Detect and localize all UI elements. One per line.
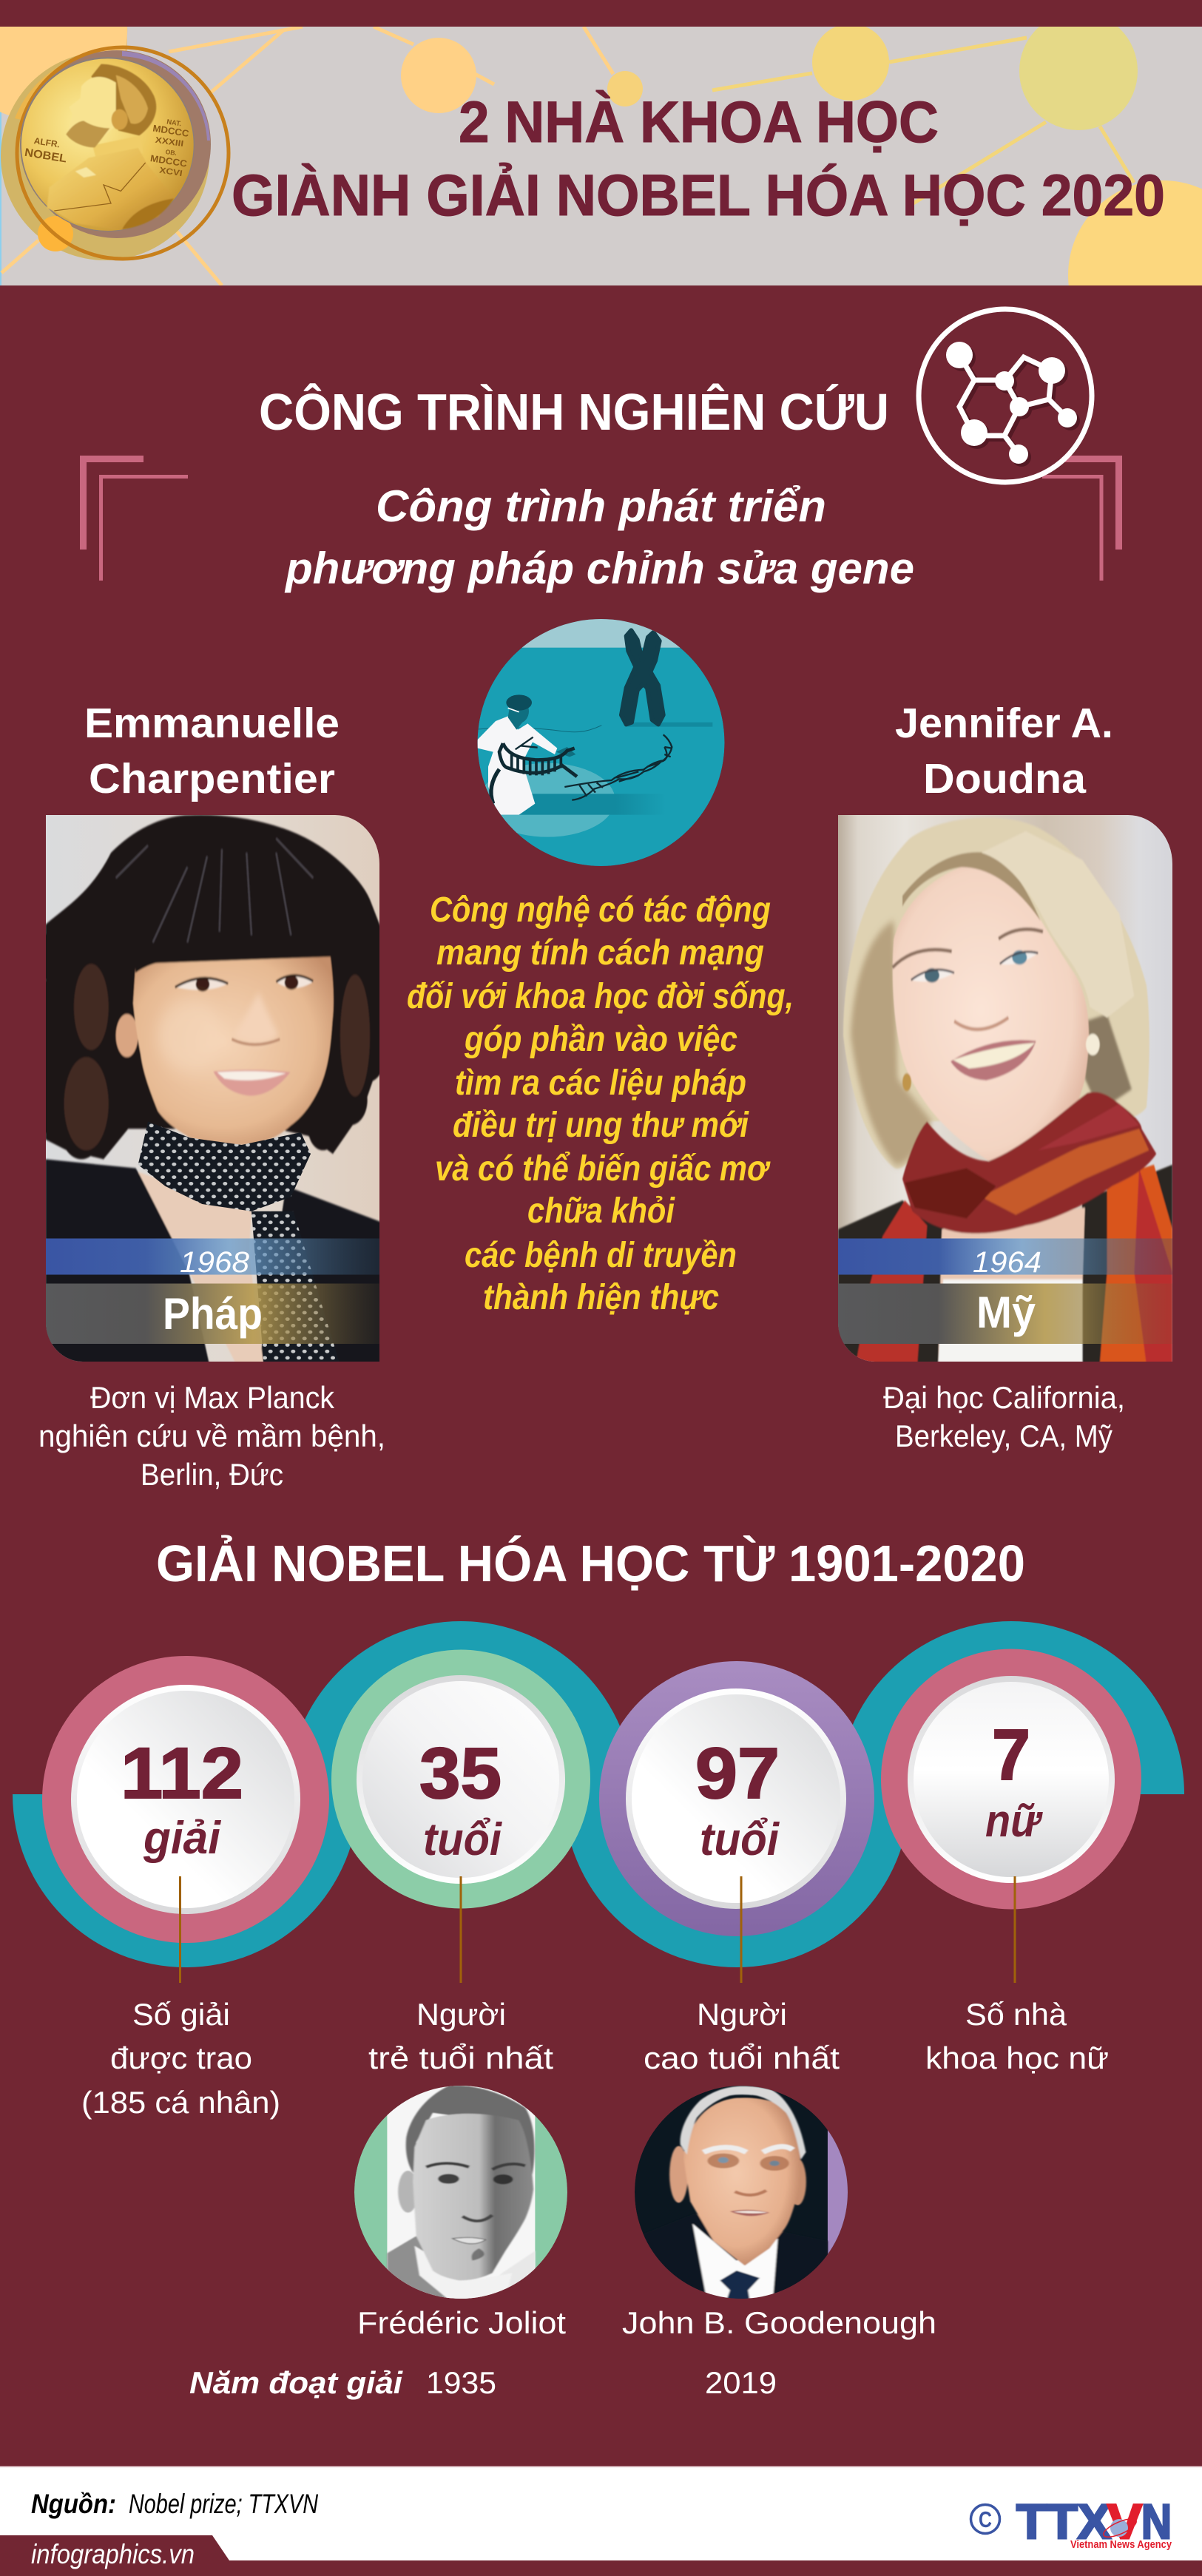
stat: 7 women xyxy=(881,1649,1141,1910)
subtitle: phương pháp chỉnh sửa gene xyxy=(284,544,914,593)
stat: 112 awards: giải xyxy=(143,1813,222,1864)
illustration: scientist editing DNA xyxy=(476,619,727,866)
Nobel portrait relief: OB. xyxy=(165,148,178,157)
caption: youngest xyxy=(368,1997,553,2075)
stat circles xyxy=(13,1621,1184,1983)
caption: youngest: Người xyxy=(416,1997,506,2032)
name: Emmanuelle xyxy=(84,700,340,747)
Nobel portrait relief: NOBEL xyxy=(24,146,67,166)
caption: women xyxy=(925,1997,1109,2075)
name: Doudna xyxy=(923,755,1087,802)
portrait: Frédéric Joliot xyxy=(354,2083,567,2302)
stat captions xyxy=(81,1997,1109,2120)
logo: TTXVN: N xyxy=(1141,2494,1172,2549)
caption: awards: (185 cá nhân) xyxy=(81,2085,280,2120)
red scarf xyxy=(856,1200,927,1365)
award years xyxy=(189,2365,777,2400)
yellow description text: chữa khỏi xyxy=(527,1191,675,1231)
yellow description text: đối với khoa học đời sống, xyxy=(407,977,794,1016)
yellow description text: tìm ra các liệu pháp xyxy=(455,1064,746,1103)
panel: Jennifer A. Doudna xyxy=(838,700,1172,1453)
Nobel portrait relief xyxy=(21,58,194,231)
country: Mỹ xyxy=(976,1288,1036,1337)
stat: 97 years old: 97 xyxy=(695,1733,780,1813)
birth year: 1964 xyxy=(973,1246,1041,1279)
award years: Năm đoạt giải xyxy=(189,2365,403,2400)
stat: 35 years old: 35 xyxy=(419,1733,502,1813)
connector lines xyxy=(180,1876,1015,1983)
stat: 7 women: nữ xyxy=(985,1796,1043,1847)
chromosome xyxy=(627,723,712,727)
subtitle: Công trình phát triển xyxy=(376,481,826,531)
stat: 112 awards: 112 xyxy=(121,1733,243,1813)
title: GIÀNH GIẢI NOBEL HÓA HỌC 2020 xyxy=(232,162,1165,228)
yellow description text: Công nghệ có tác động xyxy=(430,890,771,930)
portrait photo xyxy=(32,815,391,1365)
caption: oldest: Người xyxy=(697,1997,787,2032)
subtitle xyxy=(284,481,914,593)
name xyxy=(84,700,340,802)
portrait: John B. Goodenough xyxy=(635,2083,851,2302)
Nobel portrait relief: MDCCC xyxy=(149,153,188,169)
Nobel portrait relief: MDCCC xyxy=(152,123,189,139)
caption: awards xyxy=(81,1997,280,2120)
stat: 7 women: 7 xyxy=(992,1714,1030,1795)
yellow description text: góp phần vào việc xyxy=(464,1020,737,1059)
footer xyxy=(0,2466,1202,2576)
portrait photo xyxy=(838,815,1172,1365)
section heading: Nobel statistics: GIẢI NOBEL HÓA HỌC TỪ 1901-2020 xyxy=(156,1535,1025,1592)
icon: molecule xyxy=(919,309,1092,482)
medal xyxy=(1,27,229,260)
caption: oldest xyxy=(644,1997,840,2075)
teal serpentine ribbon xyxy=(13,1621,1184,1967)
corner brackets xyxy=(83,459,1118,581)
name xyxy=(895,700,1113,802)
polka dot scarf xyxy=(138,1122,311,1211)
Nobel portrait relief: XXXIII xyxy=(155,136,184,149)
logo: TTXVN: C xyxy=(979,2506,992,2532)
header banner xyxy=(0,27,1202,285)
affiliation xyxy=(883,1380,1125,1453)
stat: 35 years old: tuổi xyxy=(423,1814,503,1865)
laureate names xyxy=(357,2305,936,2340)
affiliation: nghiên cứu về mầm bệnh, xyxy=(38,1419,385,1453)
title: 2 NHÀ KHOA HỌC xyxy=(459,89,939,155)
caption: women: Số nhà xyxy=(965,1997,1067,2032)
yellow description text: các bệnh di truyền xyxy=(465,1236,737,1275)
panel: Emmanuelle Charpentier xyxy=(32,700,391,1492)
yellow description text: mang tính cách mạng xyxy=(436,933,764,973)
caption: awards: Số giải xyxy=(132,1997,230,2032)
scientist xyxy=(478,716,557,815)
caption: youngest: trẻ tuổi nhất xyxy=(368,2041,553,2075)
footer: infographics.vn xyxy=(31,2539,195,2569)
name: Jennifer A. xyxy=(895,700,1113,747)
Nobel portrait relief: XCVI xyxy=(159,166,183,178)
Nobel portrait relief: ALFR. xyxy=(33,135,61,149)
name: Charpentier xyxy=(89,755,335,802)
DNA ladder xyxy=(491,734,672,804)
laureate names: Frédéric Joliot xyxy=(357,2305,566,2340)
stat: 97 years old xyxy=(599,1661,874,1936)
affiliation xyxy=(38,1380,385,1492)
logo: TTXVN: V xyxy=(1107,2494,1142,2549)
affiliation: Đại học California, xyxy=(883,1380,1125,1415)
laureate names: John B. Goodenough xyxy=(622,2305,936,2340)
source: Nguồn: xyxy=(31,2489,116,2519)
source xyxy=(31,2489,318,2519)
caption: awards: được trao xyxy=(110,2041,252,2075)
award years: 2019 xyxy=(705,2365,777,2400)
website tab xyxy=(0,2535,229,2560)
banner molecule decoration xyxy=(0,27,1202,285)
Nobel portrait relief: NAT. xyxy=(166,118,182,127)
stat: 35 years old xyxy=(331,1649,590,1908)
yellow description text xyxy=(407,890,794,1317)
stat: 97 years old: tuổi xyxy=(700,1814,780,1865)
logo: TTXVN xyxy=(970,2494,1172,2551)
award years: 1935 xyxy=(426,2365,496,2400)
affiliation: Berlin, Đức xyxy=(141,1457,283,1492)
jacket and blouse xyxy=(838,1200,945,1365)
yellow description text: thành hiện thực xyxy=(483,1278,719,1317)
logo: TTXVN: Vietnam News Agency xyxy=(1070,2538,1172,2551)
affiliation: Đơn vị Max Planck xyxy=(90,1380,335,1415)
caption: women: khoa học nữ xyxy=(925,2041,1109,2075)
yellow description text: và có thể biến giấc mơ xyxy=(435,1149,771,1189)
stat: 112 awards xyxy=(42,1656,329,1943)
logo: TTXVN: TTX xyxy=(1016,2494,1111,2549)
title xyxy=(232,89,1165,228)
section heading: research work: CÔNG TRÌNH NGHIÊN CỨU xyxy=(259,382,889,441)
country: Pháp xyxy=(163,1289,263,1339)
caption: oldest: cao tuổi nhất xyxy=(644,2041,840,2075)
birth year: 1968 xyxy=(180,1246,250,1279)
source: Nobel prize; TTXVN xyxy=(129,2489,318,2519)
yellow description text: điều trị ung thư mới xyxy=(453,1106,749,1145)
affiliation: Berkeley, CA, Mỹ xyxy=(895,1419,1112,1453)
